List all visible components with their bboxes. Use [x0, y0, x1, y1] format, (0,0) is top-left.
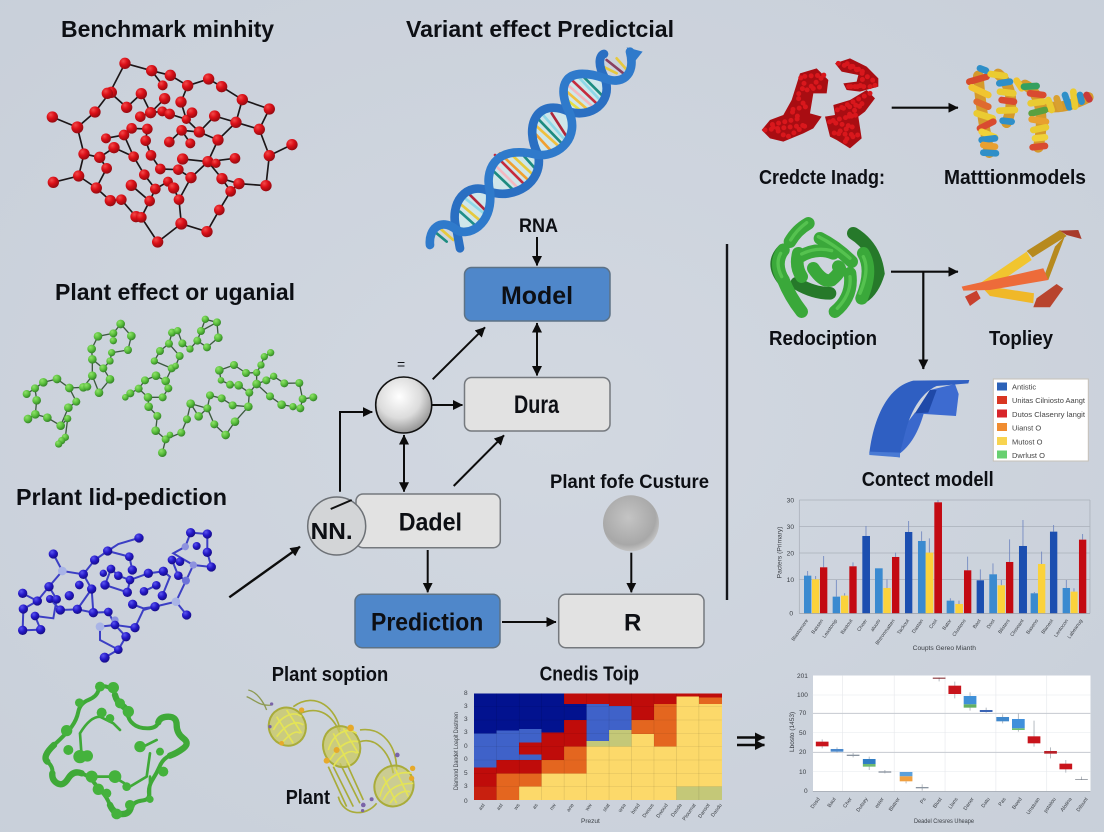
- heatmap chart: nw: [549, 803, 558, 812]
- arrow: sphere to Dura: [432, 404, 462, 406]
- heatmap chart: 0: [464, 756, 468, 763]
- arrow: RNA to Model: [536, 237, 538, 266]
- legend: Mutost O: [1012, 438, 1043, 446]
- icon: yellow orange ribbon: [962, 230, 1082, 307]
- heatmap chart: 0: [464, 743, 468, 750]
- heatmap chart: ast: [478, 802, 487, 812]
- bar chart: Blanest: [1040, 618, 1055, 635]
- node: grey sphere: [603, 495, 659, 551]
- bar chart: 30: [787, 524, 794, 531]
- box plot chart: Blust: [932, 796, 944, 810]
- heatmap chart: 3: [464, 716, 468, 723]
- heading: Cnedis Toip: Cnedis Toip: [540, 664, 639, 686]
- heading: Plant effect or uganial: Plant effect or uganial: [55, 279, 295, 305]
- box plot chart: Pas: [998, 796, 1008, 807]
- bar chart: Blisters: [997, 618, 1012, 635]
- box: Model: Model: [501, 282, 573, 310]
- icon: rainbow helices: [969, 68, 1089, 153]
- molecule: green ribbon loop: [46, 682, 187, 819]
- bar chart: [777, 497, 1090, 652]
- heatmap chart: wsa: [617, 803, 628, 814]
- heading: Prlant lid-pediction: Prlant lid-pediction: [16, 484, 227, 510]
- legend: Uianst O: [1012, 424, 1041, 432]
- box plot chart: Baut: [827, 796, 838, 809]
- bar chart: Bastout: [840, 618, 855, 636]
- label: Topliey: Topliey: [989, 328, 1054, 350]
- bar chart: Lentocon: [1053, 618, 1070, 639]
- box plot chart: 20: [799, 749, 807, 756]
- arrow: Prediction to R: [502, 621, 556, 623]
- box plot chart: Daner: [963, 796, 976, 812]
- label: equals sign: =: [397, 356, 405, 372]
- heatmap chart: ws: [513, 802, 522, 811]
- node: white sphere: [376, 377, 432, 433]
- box plot chart: Lbosto (1453): [789, 712, 796, 752]
- box plot chart: 10: [799, 769, 807, 776]
- label: Redociption: Redociption: [769, 328, 877, 350]
- arrow: Dadel to Prediction: [427, 550, 429, 592]
- bar chart: 0: [789, 611, 793, 618]
- heatmap chart: 3: [464, 783, 468, 790]
- heatmap chart: as: [532, 802, 540, 811]
- bar chart: Pacters (Primary): [777, 527, 784, 578]
- box: Dura: [464, 378, 610, 431]
- box: Dadel: [356, 494, 500, 548]
- arrow: red cluster to helix: [892, 107, 958, 109]
- box plot chart: 0: [804, 788, 808, 795]
- arrow: grey sphere to R: [630, 553, 632, 592]
- bar chart: Bhtronmatten: [875, 618, 897, 646]
- label: Matttionmodels: Matttionmodels: [944, 167, 1086, 189]
- heatmap chart: ast: [496, 802, 505, 812]
- box: Dadel: Dadel: [399, 509, 462, 537]
- box plot chart: Bwed: [1011, 797, 1024, 811]
- icon: green worm protein: [777, 223, 878, 312]
- node: NN. circle: [308, 497, 366, 555]
- box plot chart: Dilsunt: [1076, 796, 1090, 813]
- heatmap chart: Dasda: [670, 803, 684, 818]
- bar chart: aluuto: [870, 618, 882, 633]
- heatmap chart: Dansot: [697, 802, 712, 820]
- heatmap chart: [453, 690, 724, 825]
- legend: Dutos Clasenry langit: [1012, 410, 1086, 419]
- bar chart: Tackout: [896, 618, 911, 636]
- box plot chart: Llans: [948, 796, 960, 810]
- bar chart: Clusteno: [951, 618, 968, 638]
- heading: Benchmark minhity: Benchmark minhity: [61, 16, 274, 42]
- label: Plant soption: Plant soption: [272, 664, 388, 686]
- label: RNA: RNA: [519, 216, 558, 237]
- divider line: [726, 244, 728, 600]
- icon: yellow plant tangle: [247, 690, 420, 813]
- heatmap chart: 0: [464, 798, 468, 805]
- bar chart: Dastan: [911, 618, 925, 635]
- bar chart: Cheer: [856, 618, 869, 633]
- legend: Antistic: [1012, 382, 1036, 392]
- box: Dura: Dura: [514, 391, 560, 419]
- box plot chart: Dutsey: [855, 796, 870, 813]
- heatmap chart: Diamond Dandet Loapit Dastmen: [453, 712, 460, 790]
- box plot chart: Datu: [980, 797, 992, 809]
- box plot chart: Alotina: [1060, 797, 1074, 813]
- heatmap chart: stat: [602, 802, 612, 813]
- box plot chart: Ps: [919, 796, 928, 805]
- heatmap chart: ane: [566, 803, 576, 813]
- bar chart: Bassen: [811, 618, 825, 635]
- bar chart: Bator: [942, 618, 953, 632]
- icon: blue curved fold: [869, 380, 969, 457]
- heatmap chart: 5: [464, 770, 468, 777]
- box: Prediction: [355, 594, 500, 648]
- heading: Contect modell: Contect modell: [862, 469, 994, 491]
- heatmap chart: Dwous: [642, 802, 656, 819]
- bar chart: Labeanug: [1067, 618, 1084, 640]
- box plot chart: 70: [799, 710, 807, 717]
- legend: Dwrlust O: [1012, 451, 1045, 460]
- bar chart: 20: [787, 550, 794, 557]
- arrow: Dadel to Dura: [454, 435, 504, 486]
- bar chart: Coupts Gereo Mianth: [913, 645, 976, 652]
- box: R: R: [624, 610, 641, 636]
- box plot chart: pstatou: [1043, 797, 1058, 814]
- arrow: green protein to ribbon: [891, 271, 958, 273]
- heatmap chart: Dasdu: [710, 803, 724, 818]
- label: Plant fofe Custure: Plant fofe Custure: [550, 472, 709, 493]
- bar chart: Cost: [928, 618, 939, 630]
- legend: Unitas Cilniosto Aangt: [1012, 396, 1086, 405]
- molecule: red network: [47, 58, 298, 248]
- icon: red protein cluster: [762, 58, 878, 148]
- heatmap chart: Ptoumat: [682, 802, 698, 822]
- arrow: double right arrows: [737, 738, 764, 745]
- box: Prediction: Prediction: [371, 609, 483, 637]
- molecule: blue network: [18, 528, 216, 663]
- box plot chart: Unstuan: [1026, 797, 1042, 816]
- heatmap chart: Dwoud: [655, 803, 670, 819]
- box plot chart: Dosd: [810, 797, 822, 810]
- heatmap chart: 3: [464, 703, 468, 710]
- node: NN. circle: NN.: [311, 518, 353, 544]
- arrow: Model to Dura double: [536, 323, 538, 376]
- box plot chart: [789, 673, 1090, 825]
- arrow: sphere to Model: [433, 327, 485, 379]
- heatmap chart: ww: [584, 803, 594, 812]
- box plot chart: 100: [797, 692, 808, 699]
- molecule: green chain: [23, 316, 317, 457]
- bar chart: 10: [787, 577, 794, 584]
- box: R: [559, 594, 704, 648]
- bar chart: Baseno: [1025, 618, 1040, 636]
- bar chart: 30: [787, 497, 794, 504]
- arrow: NN elbow to sphere: [340, 412, 372, 492]
- bar chart: Leastonip: [822, 618, 839, 640]
- legend: [993, 379, 1088, 461]
- label: Plant: Plant: [286, 787, 330, 809]
- heatmap chart: 8: [464, 690, 468, 697]
- bar chart: Closeant: [1009, 618, 1026, 638]
- label: Credcte Inadg:: Credcte Inadg:: [759, 167, 885, 189]
- heading: Variant effect Predictcial: Variant effect Predictcial: [406, 16, 674, 42]
- arrow: down to blue fold: [922, 272, 924, 369]
- heatmap chart: besd: [630, 803, 642, 815]
- box: Model: [464, 268, 610, 321]
- box plot chart: ester: [874, 796, 886, 810]
- heatmap chart: Prezut: [581, 818, 600, 825]
- arrow: input to NN: [229, 547, 300, 597]
- box plot chart: 201: [797, 673, 808, 680]
- arrow: sphere to Dadel double: [403, 435, 405, 492]
- bar chart: Blastomere: [791, 618, 810, 642]
- box plot chart: 50: [799, 730, 807, 737]
- box plot chart: Blatrer: [888, 796, 902, 813]
- bar chart: Dost: [986, 618, 997, 630]
- heatmap chart: 3: [464, 729, 468, 736]
- icon: DNA double helix: [430, 47, 643, 248]
- bar chart: Bast: [972, 618, 983, 630]
- box plot chart: Deadel Cresres Uheape: [914, 818, 974, 825]
- box plot chart: Cher: [842, 796, 854, 809]
